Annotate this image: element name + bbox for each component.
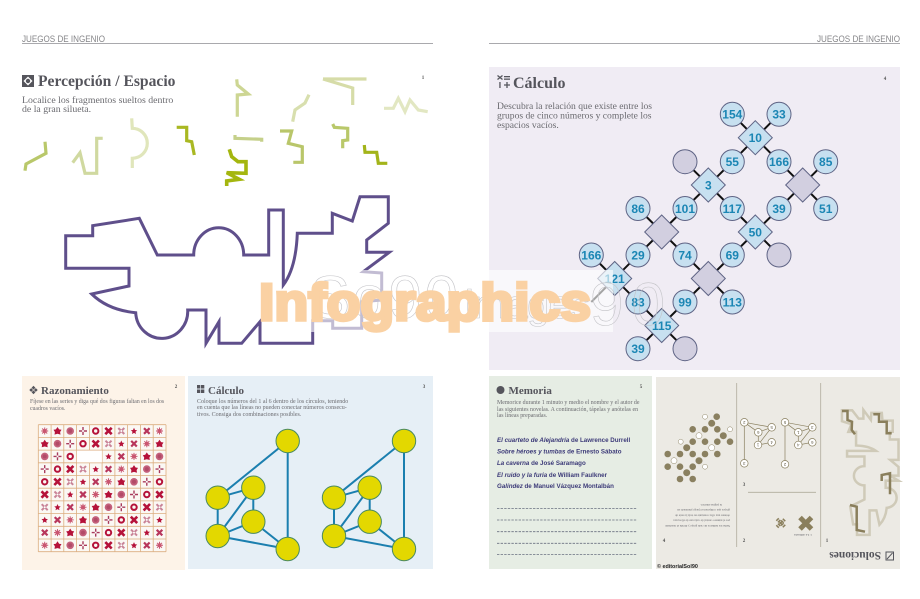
solution: number graphs: 5 xyxy=(770,425,773,430)
network values: 69 xyxy=(726,248,739,262)
page number 2: 2 xyxy=(175,385,178,390)
icon: soluciones xyxy=(886,552,894,560)
symbol grid xyxy=(38,425,166,552)
heading: percepcion: Percepción / Espacio xyxy=(38,73,176,90)
panel: calculo large xyxy=(489,67,900,370)
solution: upside-down text: la página anterior. xyxy=(700,503,722,507)
network values: 10 xyxy=(749,131,762,145)
icon: percepcion xyxy=(22,75,34,87)
novel list: Sobre héroes y tumbas de Ernesto Sábato xyxy=(497,448,622,456)
heading: soluciones upside down: Soluciones xyxy=(829,549,881,561)
text: calculo large instructions xyxy=(497,101,652,131)
right running header: JUEGOS DE INGENIO xyxy=(817,34,900,44)
solution: silhouette xyxy=(842,410,899,535)
solution: number graphs: 4 xyxy=(770,440,773,445)
watermark ghost logo: 90 xyxy=(590,271,665,338)
large silhouette xyxy=(66,197,389,343)
panel: percepcion espacio xyxy=(22,73,428,343)
solution: number graphs: 1 xyxy=(797,430,800,435)
solution: upside-down text: grupos que componen el juego planteado en xyxy=(677,508,730,512)
network values: 39 xyxy=(772,202,786,216)
network values xyxy=(581,108,833,356)
network nodes: diamonds xyxy=(598,121,820,342)
heading: razonamiento: Razonamiento xyxy=(41,385,109,397)
watermark veil xyxy=(310,270,613,332)
text: memoria instructions xyxy=(497,400,640,419)
solution numbers xyxy=(663,483,829,544)
solution numbers: 2 xyxy=(743,539,746,544)
number graph left xyxy=(206,429,299,561)
text: razonamiento instructions: cuadros vacíos. xyxy=(30,406,66,412)
page number 5: 5 xyxy=(640,385,643,390)
novel list: La caverna de José Saramago xyxy=(497,460,586,467)
novel list: Galíndez de Manuel Vázquez Montalbán xyxy=(497,483,614,490)
page number 4: 4 xyxy=(884,77,887,82)
heading: memoria: Memoria xyxy=(508,385,552,397)
text: calculo small instructions: en cuenta que las líneas no pueden conectar números consecu- xyxy=(197,405,347,411)
solution: upside-down text: obtener una cifra constante en toda la serie de xyxy=(675,513,730,517)
network values: 39 xyxy=(631,342,645,356)
solution numbers: 3 xyxy=(743,483,746,488)
solution: number graphs: 2 xyxy=(743,420,746,425)
network values: 117 xyxy=(723,202,742,216)
solution: number graphs: 3 xyxy=(811,425,814,430)
novel list xyxy=(497,437,630,490)
network values: 99 xyxy=(678,295,692,309)
network values: 50 xyxy=(749,225,762,239)
text: memoria instructions: Memorice durante 1 minuto y medio el nombre y el autor de xyxy=(497,400,640,406)
icon: calculo small xyxy=(197,385,204,393)
solution: number graphs: 4 xyxy=(797,442,800,448)
text: memoria instructions: las líneas preparadas. xyxy=(497,413,548,419)
novel list: El ruido y la furia de William Faulkner xyxy=(497,472,608,479)
solution: x figures: 1 La silhueta xyxy=(793,533,812,537)
text: calculo small instructions: tivos. Consiga dos combinaciones posibles. xyxy=(197,412,302,418)
answer lines xyxy=(497,508,637,554)
network values: 113 xyxy=(723,295,742,309)
novel list: El cuarteto de Alejandría de Lawrence Durrell xyxy=(497,437,630,444)
network values: 83 xyxy=(631,295,645,309)
network values: 51 xyxy=(819,202,833,216)
solution: number graphs: 5 xyxy=(783,420,786,425)
watermark ghost logo: So90 xyxy=(310,264,458,331)
number network xyxy=(579,102,838,361)
solution numbers: 4 xyxy=(663,539,666,544)
network values: 29 xyxy=(631,248,645,262)
publisher credit: © editorialSol90 xyxy=(657,563,698,570)
solution: number graphs xyxy=(740,418,816,468)
text: razonamiento instructions: Fíjese en las series y diga qué dos figuras faltan en los dos xyxy=(30,398,165,405)
solution: x figures xyxy=(777,518,812,537)
text: calculo small instructions: Coloque los números del 1 al 6 dentro de los círculos, teniendo xyxy=(197,399,348,405)
network values: 86 xyxy=(631,202,645,216)
heading: calculo large: Cálculo xyxy=(513,75,565,92)
network values: 166 xyxy=(581,248,602,262)
number graph right xyxy=(322,429,416,561)
text: calculo large instructions: grupos de cinco números y complete los xyxy=(497,110,652,122)
solution numbers: 1 xyxy=(826,539,829,544)
watermark wordmark: Infographics xyxy=(259,274,591,332)
solution: number graphs: 2 xyxy=(783,462,786,467)
solution: upside-down text: por el número central de cada uno de ellos para xyxy=(673,519,730,523)
network values: 74 xyxy=(678,248,692,262)
network values: 154 xyxy=(722,108,743,122)
network values: 166 xyxy=(769,155,789,169)
panel: calculo small xyxy=(188,376,433,569)
solution: upside-down text: Suma los números de cada grupo y divida el resultado xyxy=(665,524,730,528)
heading: calculo small: Cálculo xyxy=(208,385,245,397)
text: calculo large instructions: espacios vacíos. xyxy=(497,120,559,131)
page number 1: 1 xyxy=(422,76,425,81)
network values: 55 xyxy=(726,155,739,169)
text: percepcion instructions: de la gran silueta. xyxy=(22,104,91,115)
page number 3: 3 xyxy=(423,385,426,390)
panel: memoria xyxy=(489,376,652,569)
panel: soluciones xyxy=(656,377,900,570)
icon: razonamiento xyxy=(29,386,38,394)
left running header: JUEGOS DE INGENIO xyxy=(22,34,105,44)
text: percepcion instructions: Localice los fragmentos sueltos dentro xyxy=(22,95,173,106)
text: calculo large instructions: Descubra la relación que existe entre los xyxy=(497,101,652,112)
network nodes: circles xyxy=(579,102,838,361)
text: memoria instructions: las siguientes novelas. A continuación, tápelas y anótelas en xyxy=(497,407,638,413)
solution: number graphs: 6 xyxy=(811,440,814,445)
network values: 121 xyxy=(605,272,625,286)
loose fragments xyxy=(25,79,428,186)
icon: calculo large xyxy=(498,76,510,88)
panel: razonamiento xyxy=(22,376,185,570)
network values: 85 xyxy=(819,155,833,169)
network values: 101 xyxy=(675,202,695,216)
text: percepcion instructions xyxy=(22,95,173,115)
network values: 33 xyxy=(772,108,786,122)
text: calculo small instructions xyxy=(197,399,348,418)
network values: 3 xyxy=(705,178,712,192)
network values: 115 xyxy=(652,319,672,333)
text: razonamiento instructions xyxy=(30,398,165,412)
solution: upside-down text xyxy=(665,503,730,528)
icon: memoria xyxy=(496,386,504,394)
solution: number graphs: 1 xyxy=(756,442,759,448)
watermark ghost logo: images xyxy=(465,283,590,327)
watermark xyxy=(259,264,665,338)
solution: number graphs: 6 xyxy=(757,430,760,435)
watermark ghost logo xyxy=(310,264,665,338)
solution: number network xyxy=(664,413,733,482)
solution: number graphs: 3 xyxy=(743,461,746,466)
